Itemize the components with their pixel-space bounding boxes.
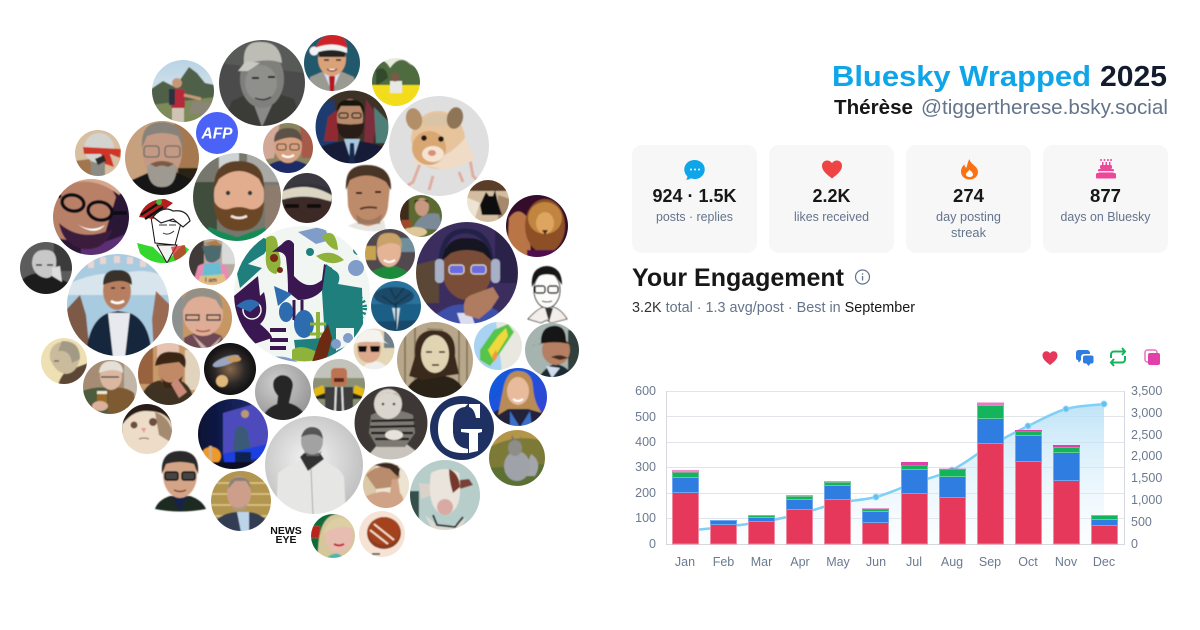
avatar: man in white shirt, black and white	[264, 415, 364, 515]
month labels: Aug	[941, 555, 963, 569]
avatar: purple tinted man with glasses	[52, 178, 130, 256]
avatar: pen sketch man with glasses	[528, 266, 567, 323]
right axis labels: 2,500	[1131, 428, 1162, 442]
right axis labels: 2,000	[1131, 449, 1162, 463]
panel: days on Bluesky: days on Bluesky	[1060, 210, 1151, 224]
left axis labels: 100	[635, 511, 656, 525]
avatar: hamster	[388, 95, 490, 197]
chart legend icons	[1042, 348, 1160, 366]
avatar: grey squirrel	[488, 429, 546, 487]
avatar: bearded man in green	[192, 152, 282, 242]
title: Bluesky Wrapped 2025: 2025	[1100, 61, 1167, 93]
heading: Your Engagement: Your Engagement	[632, 264, 845, 292]
avatar: AFP logo: AFP	[200, 126, 233, 142]
month labels: Oct	[1018, 555, 1038, 569]
avatar: blonde TV presenter	[488, 367, 548, 427]
avatar: lego-like mascot	[312, 358, 366, 412]
panel: likes received: likes received	[794, 210, 869, 224]
month labels: Jun	[866, 555, 886, 569]
avatar: galaxy	[203, 342, 257, 396]
icon: info	[856, 270, 870, 284]
icon: flame	[961, 159, 978, 180]
avatar: silhouette	[254, 363, 312, 421]
avatar: man with thumb raised	[362, 461, 410, 509]
panel: likes received	[769, 145, 894, 253]
avatar: sepia portrait of woman	[396, 321, 474, 399]
panel: posts and replies	[632, 145, 757, 253]
panel: posts and replies: posts · replies	[656, 210, 733, 224]
month labels: Jan	[675, 555, 695, 569]
month labels: Jul	[906, 555, 922, 569]
panel: day posting streak: 274	[953, 186, 984, 206]
profile name and handle: @tiggertherese.bsky.social	[921, 97, 1168, 119]
avatar: man in suit with bunting	[66, 253, 170, 357]
panel: day posting streak: streak	[951, 226, 987, 240]
avatar: man with glasses and grey goatee	[124, 120, 200, 196]
avatar: person with headphones	[415, 221, 519, 325]
avatar: white cat	[121, 403, 173, 455]
logo: News Eye	[270, 525, 302, 546]
avatar: blonde woman selfie	[310, 513, 356, 559]
avatar: older man with beer	[82, 359, 138, 415]
month labels: Apr	[790, 555, 810, 569]
chart: engagement by month	[635, 384, 1162, 569]
month labels: Mar	[751, 555, 772, 569]
legend: likes	[1042, 351, 1058, 365]
profile name and handle: Thérèse	[834, 97, 913, 119]
month labels: Nov	[1055, 555, 1078, 569]
legend: replies	[1076, 350, 1094, 366]
avatar: woman in white hat and sunglasses	[353, 328, 395, 370]
right axis labels: 3,000	[1131, 406, 1162, 420]
engagement summary: 3.2K total · 1.3 avg/post · Best in September	[632, 300, 915, 316]
avatar: smiling man with glasses	[262, 122, 314, 174]
panel: day posting streak	[906, 145, 1031, 253]
avatar: hiker at Machu Picchu	[151, 59, 215, 123]
right axis labels: 500	[1131, 515, 1152, 529]
avatar: conference stage	[197, 398, 269, 470]
left axis labels: 0	[649, 537, 656, 551]
cumulative area	[685, 404, 1104, 544]
month labels: Feb	[713, 555, 734, 569]
avatar: man with suit and beard	[315, 90, 389, 164]
left axis labels	[635, 384, 656, 551]
avatar: laughing bearded man	[137, 342, 201, 406]
month labels: Dec	[1093, 555, 1115, 569]
avatar: baby in striped jumper, old photo	[354, 386, 428, 460]
avatar: sheep	[409, 459, 481, 531]
right axis labels	[1131, 384, 1162, 551]
avatar: man against brick wall	[210, 470, 272, 532]
avatar: person in wide hat, close-up	[281, 172, 333, 224]
legend: quotes	[1145, 350, 1160, 365]
avatar: decorative pattern with animals	[233, 225, 371, 363]
avatar: man with dark glasses, cut-out	[155, 451, 206, 512]
avatar bubble cloud	[19, 34, 580, 559]
month labels: May	[826, 555, 851, 569]
panel: days on Bluesky: 877	[1090, 186, 1121, 206]
avatar: cartoon man in green jacket	[137, 199, 191, 263]
panel: day posting streak: day posting	[936, 210, 1001, 224]
avatar: lizard in tie-dye hoodie	[188, 238, 236, 286]
stacked bars	[672, 402, 1118, 544]
avatar: tree illustration	[370, 280, 422, 332]
logo: News Eye: NEWS	[270, 525, 302, 537]
icon: birthday cake	[1096, 159, 1116, 178]
avatar: AFP logo	[195, 111, 239, 155]
left axis labels: 600	[635, 384, 656, 398]
icon: heart	[822, 160, 842, 178]
avatar: man in santa hat	[303, 34, 361, 92]
left axis labels: 500	[635, 410, 656, 424]
cumulative line	[685, 401, 1107, 531]
avatar: grey-haired man with glasses	[171, 287, 233, 349]
avatar: lion	[505, 194, 569, 258]
panel: posts and replies: 924 · 1.5K	[652, 186, 736, 206]
month labels: Sep	[979, 555, 1001, 569]
right axis labels: 1,000	[1131, 493, 1162, 507]
avatar: black cat on blanket	[466, 179, 510, 223]
avatar: man at restaurant table	[399, 194, 443, 238]
month labels	[675, 555, 1115, 569]
panel: days on Bluesky	[1043, 145, 1168, 253]
avatar: brown button badge	[358, 510, 406, 558]
left axis labels: 300	[635, 460, 656, 474]
avatar: woman in green shirt	[364, 228, 416, 280]
avatar: man in bowler hat	[524, 322, 580, 378]
right axis labels: 3,500	[1131, 384, 1162, 398]
avatar: lightbulb robot with red bandana	[74, 129, 122, 177]
left axis labels: 400	[635, 435, 656, 449]
avatar: figure in yellow field	[371, 57, 421, 107]
legend: reposts	[1111, 348, 1125, 366]
panel: likes received: 2.2K	[812, 186, 850, 206]
avatar: bald man black and white	[19, 241, 73, 295]
avatar: Guardian G logo	[429, 395, 495, 461]
left axis labels: 200	[635, 486, 656, 500]
avatar: rain radar map	[473, 321, 523, 371]
right axis labels: 1,500	[1131, 471, 1162, 485]
avatar: lizard in tie-dye hoodie: I am	[205, 278, 217, 284]
avatar: man's face, cut-out	[346, 165, 391, 231]
avatar: elderly man in sepia	[40, 337, 88, 385]
icon: speech bubble	[684, 160, 705, 180]
logo: News Eye: EYE	[275, 534, 297, 546]
avatar: man in cap, black and white	[218, 39, 306, 127]
right axis labels: 0	[1131, 537, 1138, 551]
title: Bluesky Wrapped 2025: Bluesky Wrapped	[832, 61, 1091, 93]
